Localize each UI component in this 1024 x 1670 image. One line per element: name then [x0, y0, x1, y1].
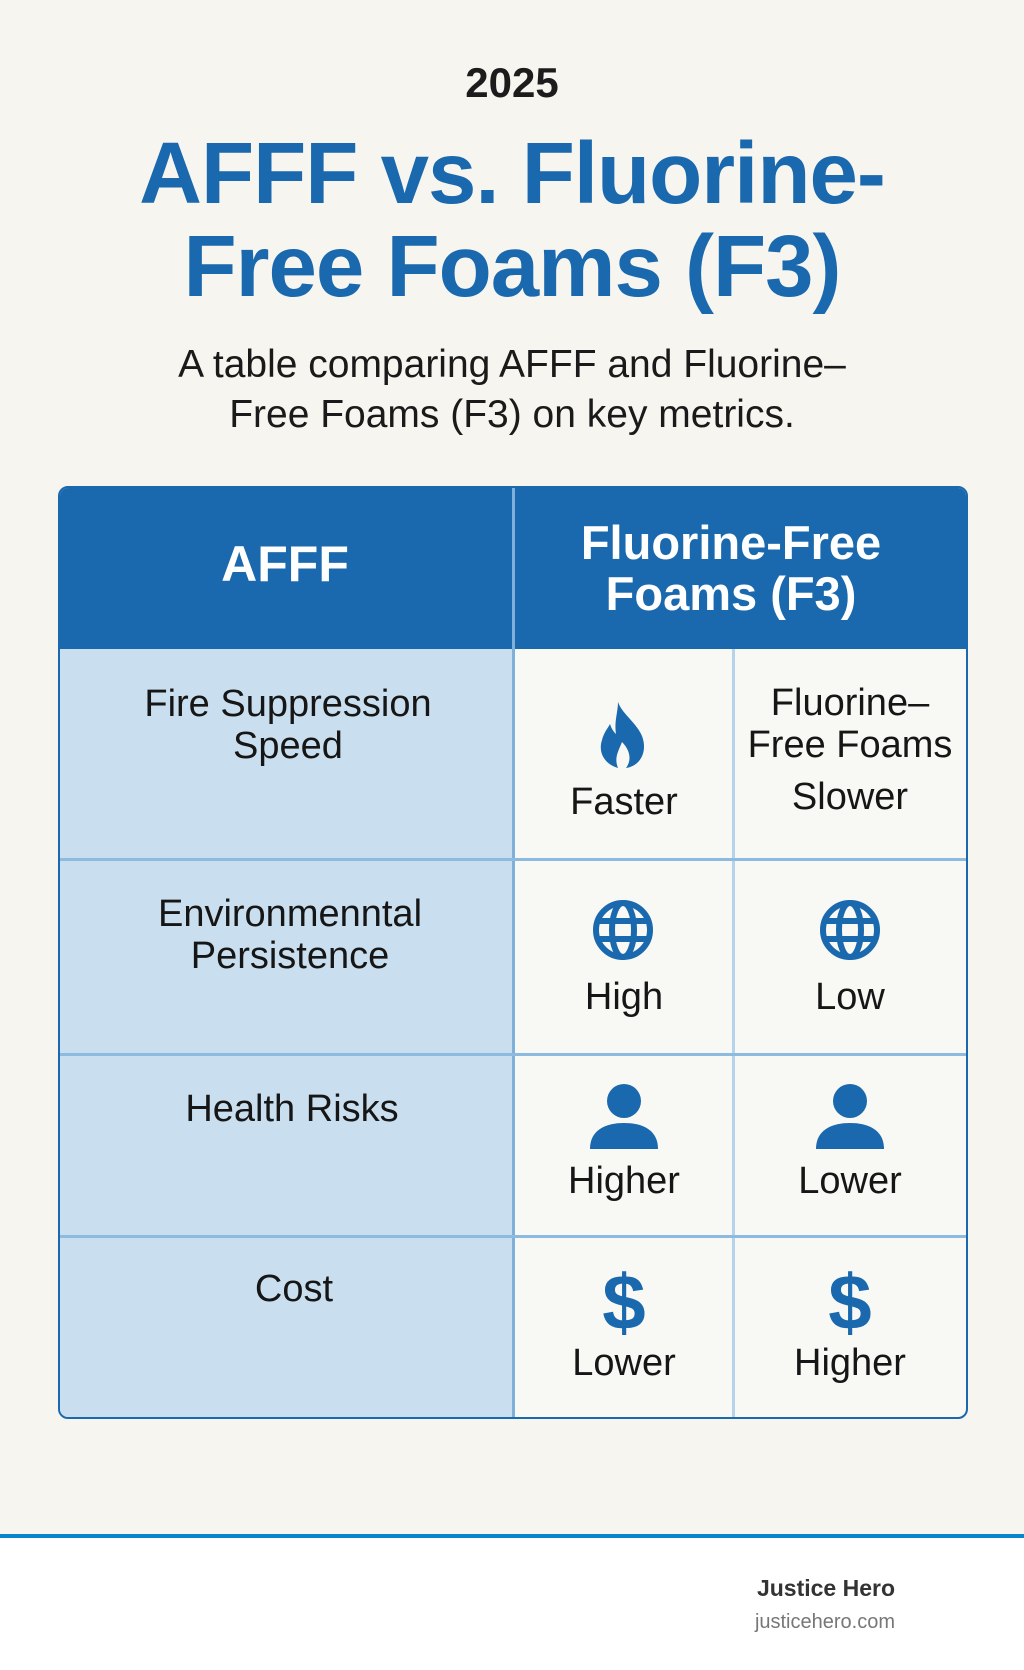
value: slower: [748, 682, 952, 818]
value: slower: Slower: [792, 776, 908, 818]
row label: health: Health Risks: [185, 1088, 399, 1130]
value: faster: Faster: [570, 781, 678, 823]
icon: person: [590, 1084, 658, 1149]
value: low: Low: [815, 976, 885, 1018]
year: 2025: [465, 59, 559, 106]
value: lower: Lower: [572, 1342, 676, 1384]
row label: fire suppression: Speed: [233, 725, 343, 767]
icon: person: [816, 1084, 884, 1149]
brand url: justicehero.com: [755, 1611, 895, 1633]
icon: flame: [600, 702, 644, 768]
header: AFFF: AFFF: [221, 536, 349, 592]
value: higher: Higher: [568, 1160, 680, 1202]
brand name: Justice Hero: [757, 1575, 895, 1601]
header: F3: Foams (F3): [606, 567, 856, 620]
value: high: High: [585, 976, 663, 1018]
header: F3: [581, 516, 881, 620]
subtitle: [178, 343, 846, 436]
value: slower: Fluorine–: [771, 682, 929, 724]
subtitle: A table comparing AFFF and Fluorine–: [178, 343, 846, 386]
value: higher: Higher: [794, 1342, 906, 1384]
header row: [60, 488, 966, 649]
footer: [0, 1534, 1024, 1670]
row label: persistence: Environmenntal: [158, 893, 422, 935]
title: Free Foams (F3): [184, 218, 840, 315]
row label: persistence: Persistence: [191, 935, 389, 977]
row label: fire suppression: Fire Suppression: [144, 683, 432, 725]
row label: fire suppression: [144, 683, 432, 767]
value: lower: Lower: [798, 1160, 902, 1202]
title: AFFF vs. Fluorine-: [139, 125, 885, 222]
subtitle: Free Foams (F3) on key metrics.: [229, 393, 795, 436]
icon: dollar: $: [828, 1258, 872, 1346]
icon: globe: [593, 900, 653, 960]
value: slower: Free Foams: [748, 724, 952, 766]
header: F3: Fluorine-Free: [581, 516, 881, 569]
icon: globe: [820, 900, 880, 960]
row label: persistence: [158, 893, 422, 977]
row label: cost: Cost: [255, 1268, 333, 1310]
table: [58, 486, 968, 1419]
left column background: [60, 649, 514, 1419]
title: [139, 125, 885, 315]
icon: dollar: $: [602, 1258, 646, 1346]
